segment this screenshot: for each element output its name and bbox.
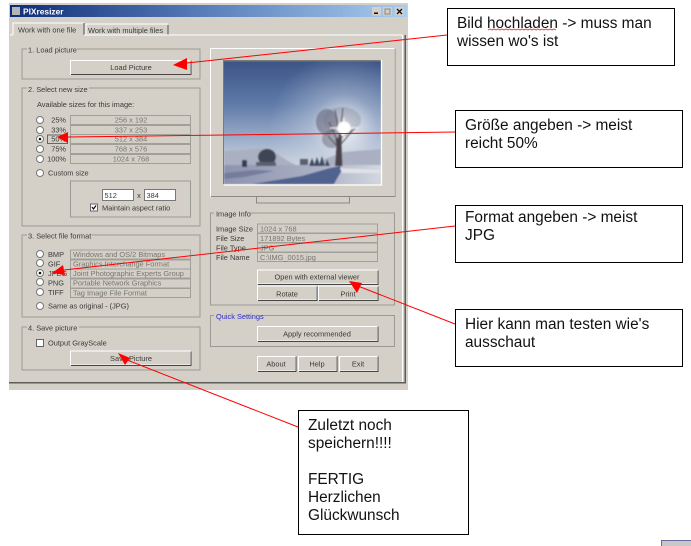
group: image info: Rotate [276, 290, 298, 298]
group: save picture: Output GrayScale [48, 338, 107, 348]
group: load picture: 1. Load picture [28, 46, 77, 54]
group: image info: File Name [216, 253, 250, 262]
group: save picture: Save Picture [110, 354, 152, 363]
group: select file format: TIFF [48, 288, 64, 297]
distant trees [258, 149, 276, 165]
group: select new size [22, 85, 200, 226]
group: select file format: Windows and OS/2 Bitmaps [73, 250, 165, 259]
group: image info: Open with external viewer [274, 272, 360, 282]
callout: upload: Bild hochladen -> muss man [457, 15, 652, 32]
size options: 337 x 253 [115, 126, 147, 134]
callout: save and finish: speichern!!!! [308, 435, 392, 452]
group: select new size: Custom size [48, 168, 89, 178]
corner widget [662, 540, 691, 546]
backlit tree [316, 107, 361, 166]
photo: winter landscape [224, 61, 381, 184]
group: image info: JPG [260, 244, 275, 252]
tabs: Work with multiple files [88, 26, 163, 35]
callout: format: JPG [465, 227, 495, 244]
group: image info: Image Info [216, 210, 251, 218]
size options: 768 x 576 [115, 144, 147, 154]
group: select file format: Tag Image File Format [73, 288, 147, 298]
size options: 25% [51, 116, 66, 124]
bottom buttons: About [266, 360, 286, 368]
group: save picture: 4. Save picture [28, 324, 77, 332]
group: select new size: x [137, 191, 141, 200]
group: select file format: GIF [48, 260, 61, 268]
callout: test [456, 310, 682, 366]
group: select file format [22, 232, 200, 317]
image preview panel [210, 48, 395, 203]
size options [36, 116, 190, 164]
group: select new size: Available sizes for this image: [37, 100, 134, 109]
group: image info: 1024 x 768 [260, 224, 297, 234]
callout: save and finish: Glückwunsch [308, 507, 400, 524]
size options: 100% [47, 154, 66, 164]
group: image info: C:\IMG_0015.jpg [260, 253, 316, 262]
title bar [10, 5, 407, 17]
size options: 256 x 192 [115, 116, 147, 124]
size options: 512 x 384 [115, 134, 147, 144]
callout: test: ausschaut [465, 334, 536, 351]
callout: size: Größe angeben -> meist [465, 117, 633, 134]
arrow: select size [57, 132, 455, 143]
group: image info: Image Size [216, 224, 253, 234]
callout: upload [448, 8, 674, 66]
group: select new size: 512 [104, 191, 117, 200]
callout: format [456, 206, 682, 262]
group: image info [210, 210, 394, 305]
group: select file format: Joint Photographic Experts Group [73, 269, 184, 278]
bottom buttons: Exit [352, 360, 364, 368]
arrow: file format [52, 226, 455, 275]
group: select file format: BMP [48, 250, 64, 259]
group: select file format: Graphics Interchange Format [73, 260, 169, 268]
group: load picture: Load Picture [110, 63, 152, 72]
callout: test: Hier kann man testen wie's [465, 316, 650, 333]
group: select file format: Portable Network Graphics [73, 278, 162, 288]
group: select file format: JPEG [48, 269, 68, 278]
group: quick settings [210, 312, 394, 346]
group: image info: File Size [216, 234, 244, 243]
group: image info: Print [340, 290, 356, 298]
group: load picture [22, 46, 200, 79]
callout: save and finish: Herzlichen [308, 489, 381, 506]
arrow: save picture [118, 353, 298, 427]
callout: size: reicht 50% [465, 135, 538, 152]
group: quick settings: Apply recommended [283, 330, 351, 338]
callout: save and finish: FERTIG [308, 471, 364, 488]
callout: upload: wissen wo's ist [456, 33, 559, 50]
group: select file format: 3. Select file format [28, 232, 91, 240]
group: select new size: 384 [146, 191, 159, 200]
group: image info: File Type [216, 244, 246, 252]
size options: 75% [51, 144, 66, 154]
tabs: Work with one file [18, 26, 76, 34]
group: select new size: 2. Select new size [28, 85, 88, 94]
group: quick settings: Quick Settings [216, 312, 264, 321]
title bar: PIXresizer [23, 6, 64, 16]
group: select file format: Same as original - (JPG) [48, 302, 129, 310]
bottom buttons: Help [309, 360, 325, 368]
group: select file format: PNG [48, 278, 64, 288]
callout: size [456, 110, 682, 168]
callout: save and finish [298, 410, 468, 534]
size options: 50% [51, 134, 66, 144]
group: select new size: Maintain aspect ratio [102, 204, 170, 212]
group: image info: 171892 Bytes [260, 234, 306, 243]
arrow: external viewer [349, 281, 455, 324]
bottom buttons [258, 356, 378, 372]
callout: save and finish: Zuletzt noch [308, 417, 392, 434]
arrow: load picture [173, 35, 447, 70]
size options: 1024 x 768 [113, 154, 149, 164]
callout: format: Format angeben -> meist [465, 209, 638, 226]
size options: 33% [51, 126, 66, 134]
application window [9, 3, 408, 390]
tabs [10, 23, 402, 35]
group: save picture [22, 324, 200, 370]
